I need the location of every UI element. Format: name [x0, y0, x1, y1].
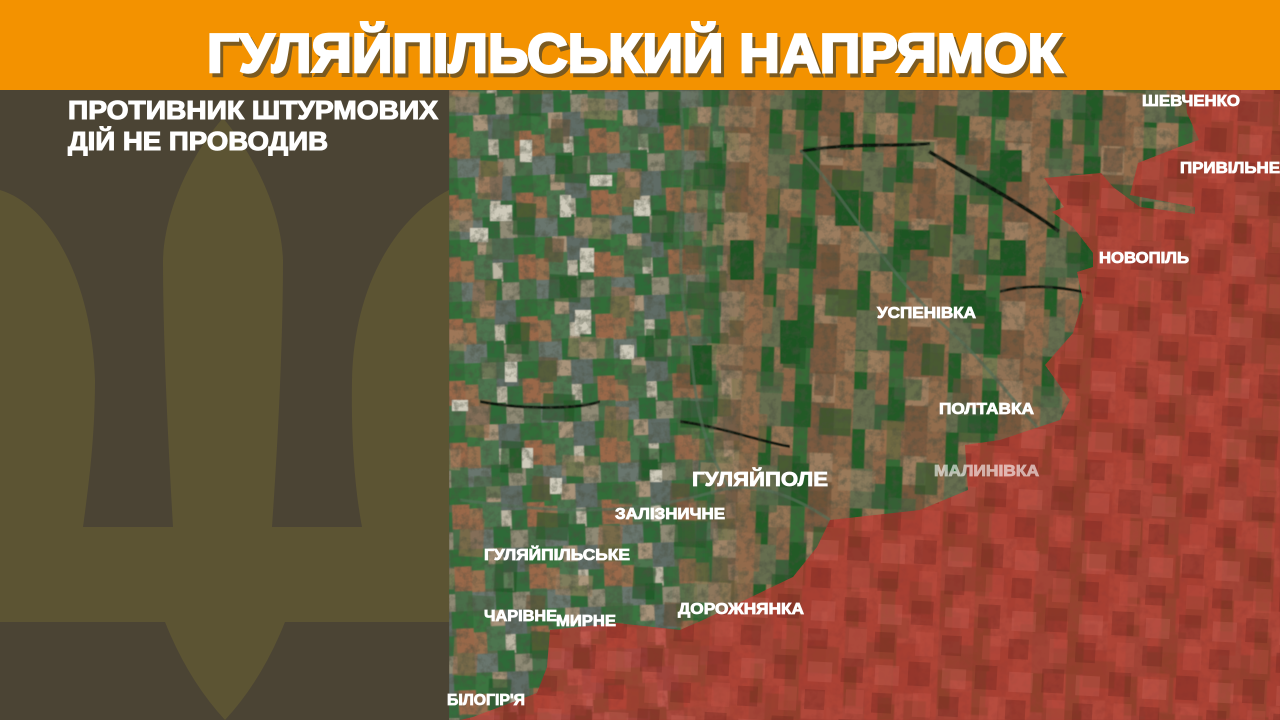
header bar — [0, 0, 1280, 90]
label: Мирне: МИРНЕ — [556, 613, 616, 630]
label: Білогір'я: БІЛОГІР'Я — [447, 692, 525, 709]
satellite map — [449, 90, 1280, 720]
label: Шевченко: ШЕВЧЕНКО — [1142, 93, 1240, 110]
label: Новопіль: НОВОПІЛЬ — [1099, 250, 1189, 267]
label: Привільне: ПРИВІЛЬНЕ — [1180, 160, 1280, 177]
label: Залізничне: ЗАЛІЗНИЧНЕ — [615, 506, 725, 523]
label: Малинівка: МАЛИНІВКА — [934, 463, 1039, 480]
icon: trident emblem — [0, 118, 449, 720]
label: Гуляйпільське: ГУЛЯЙПІЛЬСЬКЕ — [484, 546, 630, 564]
label: Гуляйполе: ГУЛЯЙПОЛЕ — [692, 467, 828, 491]
label: Дорожнянка: ДОРОЖНЯНКА — [678, 601, 804, 618]
map labels: settlements — [447, 93, 1280, 709]
label: Полтавка: ПОЛТАВКА — [939, 401, 1034, 418]
title: ГУЛЯЙПІЛЬСЬКИЙ НАПРЯМОК — [207, 21, 1062, 84]
label: Чарівне: ЧАРІВНЕ — [484, 608, 557, 625]
panel: left trident background — [0, 90, 449, 720]
title: ГУЛЯЙПІЛЬСЬКИЙ НАПРЯМОК — [210, 25, 1065, 88]
status text block: ПРОТИВНИК ШТУРМОВИХ — [68, 95, 439, 125]
status text block: ДІЙ НЕ ПРОВОДИВ — [68, 126, 328, 156]
status text block — [68, 95, 439, 156]
label: Успенівка: УСПЕНІВКА — [877, 305, 976, 322]
occupied territory overlay — [449, 90, 1280, 720]
